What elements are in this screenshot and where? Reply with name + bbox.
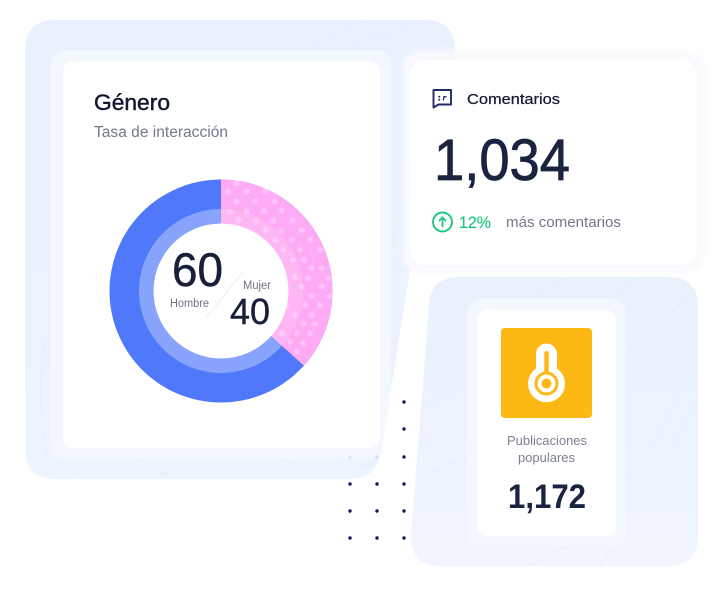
panel: genero card <box>63 61 380 448</box>
dot grid <box>348 400 406 540</box>
label: publicaciones populares <box>507 433 587 465</box>
subheading: tasa de interaccion: Tasa de interacción <box>94 124 228 141</box>
panel: genero card halo <box>51 50 391 459</box>
icon: comment bubble <box>434 90 451 108</box>
donut chart <box>110 179 333 402</box>
label: hombre: Hombre <box>170 298 209 310</box>
icon: up arrow circle <box>433 212 452 232</box>
value: 1,034: 1,034 <box>434 128 570 193</box>
heading: genero: Género <box>94 90 170 115</box>
label: mujer: Mujer <box>243 280 271 292</box>
value: 12%: 12% <box>459 213 491 232</box>
panel: comentarios card <box>410 60 697 265</box>
label: publicaciones populares: populares <box>518 450 575 465</box>
value: hombre 60: 60 <box>172 243 223 296</box>
panel: bottom-right background <box>411 277 698 566</box>
panel: publicaciones card <box>477 310 616 536</box>
panel: publicaciones card halo <box>467 299 626 546</box>
label: publicaciones populares: Publicaciones <box>507 433 587 448</box>
icon: thermometer <box>501 328 592 418</box>
value: 1,172: 1,172 <box>508 478 586 516</box>
text: mas comentarios: más comentarios <box>506 214 621 231</box>
panel: left background <box>25 20 455 479</box>
panel: comentarios card halo <box>402 50 705 273</box>
heading: comentarios: Comentarios <box>467 91 560 108</box>
value: mujer 40: 40 <box>230 291 270 332</box>
